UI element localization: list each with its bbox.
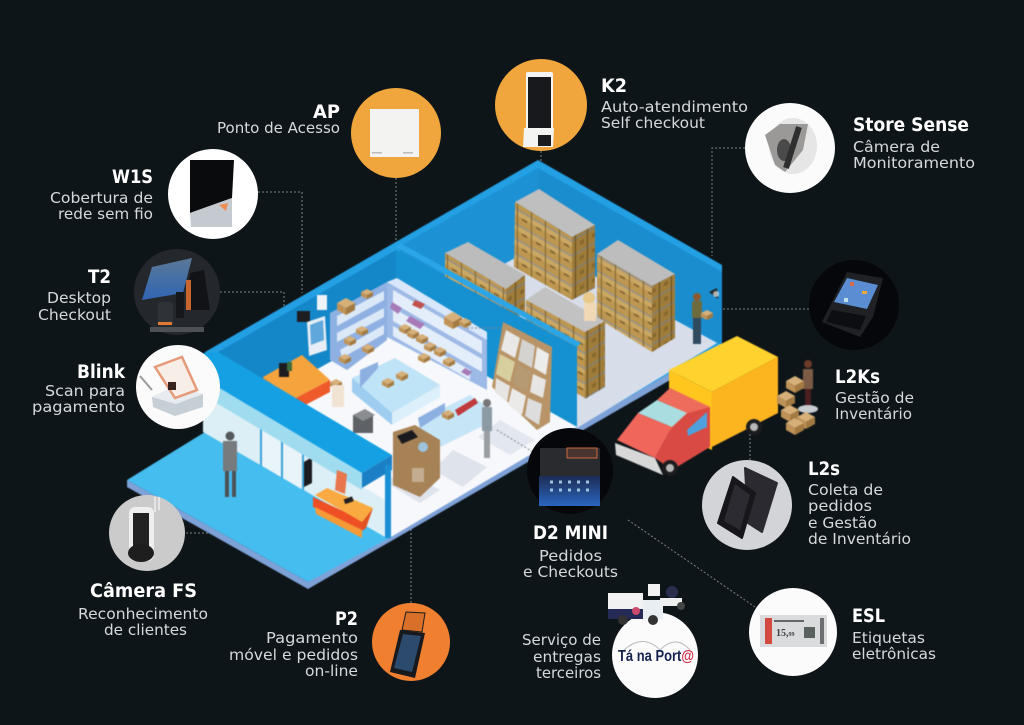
icon: AP bbox=[351, 88, 441, 178]
label: AP bbox=[217, 102, 340, 137]
outdoor customer bbox=[223, 432, 237, 497]
icon: ESL: 15,99 bbox=[776, 628, 794, 639]
label: K2: Self checkout bbox=[601, 114, 705, 132]
label: T2: Desktop bbox=[47, 289, 111, 307]
truck bbox=[615, 336, 778, 476]
label: T2: Checkout bbox=[38, 306, 111, 324]
label: W1S: W1S bbox=[112, 167, 153, 188]
shop islands bbox=[330, 358, 485, 447]
front counter bbox=[313, 470, 373, 538]
label: Store Sense: Câmera de bbox=[853, 138, 940, 156]
label: L2s: L2s bbox=[808, 459, 840, 480]
label: L2s: Coleta de bbox=[808, 481, 883, 499]
label: D2 MINI: D2 MINI bbox=[533, 523, 608, 544]
icon: P2 bbox=[372, 603, 450, 681]
label: Store Sense: Monitoramento bbox=[853, 154, 975, 172]
label: Blink: pagamento bbox=[32, 398, 125, 416]
label: ESL: Etiquetas bbox=[852, 629, 925, 647]
icon: K2 bbox=[495, 59, 587, 151]
icon: T2 bbox=[134, 249, 220, 335]
label: P2: Pagamento bbox=[266, 629, 358, 647]
label: ESL: eletrônicas bbox=[852, 645, 936, 663]
wall devices bbox=[297, 295, 327, 356]
label: K2: Auto-atendimento bbox=[601, 98, 748, 116]
label: W1S bbox=[50, 167, 153, 223]
magazine rack bbox=[492, 322, 552, 430]
warehouse shelves bbox=[445, 189, 675, 399]
label: K2: K2 bbox=[601, 76, 627, 97]
label: P2: móvel e pedidos bbox=[229, 646, 358, 664]
shop back wall bbox=[218, 250, 396, 420]
icon: Camera FS bbox=[109, 495, 185, 571]
label: K2 bbox=[601, 76, 748, 132]
label: Blink: Blink bbox=[77, 362, 126, 383]
warehouse floor bbox=[396, 245, 717, 428]
label: L2Ks: L2Ks bbox=[835, 367, 880, 388]
label: Store Sense: Store Sense bbox=[853, 115, 969, 136]
label: Câmera FS: Reconhecimento bbox=[78, 605, 208, 623]
label: P2 bbox=[229, 609, 358, 680]
label: Store Sense bbox=[853, 115, 975, 172]
floor slab bbox=[127, 340, 722, 589]
label: Blink bbox=[32, 362, 126, 416]
display tower bbox=[393, 425, 440, 497]
label: D2 MINI: e Checkouts bbox=[523, 563, 618, 581]
icon: W1S bbox=[168, 149, 258, 239]
label: AP: AP bbox=[313, 102, 340, 123]
label: L2Ks bbox=[835, 367, 914, 423]
label: P2: P2 bbox=[335, 609, 358, 630]
shop shelving bbox=[330, 278, 487, 390]
label: entregas: Serviço de bbox=[522, 631, 601, 649]
label: L2s: pedidos bbox=[808, 497, 872, 515]
icon: L2Ks bbox=[809, 260, 899, 350]
icon: Tá na Port@ delivery bbox=[608, 584, 698, 698]
label: ESL bbox=[852, 606, 936, 663]
delivery worker and boxes bbox=[777, 360, 818, 435]
label: W1S: Cobertura de bbox=[50, 189, 153, 207]
label: Câmera FS: Câmera FS bbox=[90, 581, 197, 602]
icon: Store Sense bbox=[745, 103, 835, 193]
icon: D2 MINI bbox=[527, 428, 613, 514]
label: W1S: rede sem fio bbox=[58, 205, 153, 223]
label: L2s bbox=[808, 459, 911, 548]
label: T2: T2 bbox=[88, 267, 111, 288]
label: entregas bbox=[522, 631, 601, 682]
icon: Blink bbox=[136, 345, 220, 429]
label: Blink: Scan para bbox=[45, 382, 125, 400]
dashed shop link bbox=[467, 328, 533, 452]
divider wall bbox=[396, 243, 581, 427]
label: L2s: de Inventário bbox=[808, 530, 911, 548]
icon: ESL bbox=[749, 588, 837, 676]
shop customer bbox=[482, 399, 492, 458]
label: entregas: terceiros bbox=[536, 664, 601, 682]
icon: Tá na Port@ delivery: Tá na Port@ bbox=[618, 648, 694, 665]
label: AP: Ponto de Acesso bbox=[217, 119, 340, 137]
label: T2 bbox=[38, 267, 111, 324]
leader lines bbox=[186, 148, 809, 607]
label: L2Ks: Inventário bbox=[835, 405, 912, 423]
label: D2 MINI bbox=[523, 523, 618, 581]
orange checkout counter bbox=[263, 355, 330, 412]
icon: L2s bbox=[702, 460, 792, 550]
label: ESL: ESL bbox=[852, 606, 885, 627]
storefront bbox=[203, 352, 392, 538]
label: D2 MINI: Pedidos bbox=[539, 547, 602, 565]
label: entregas: entregas bbox=[533, 648, 601, 666]
label: P2: on-line bbox=[305, 662, 358, 680]
warehouse walls bbox=[205, 160, 722, 427]
isometric store illustration bbox=[127, 160, 722, 589]
shop floor bbox=[205, 325, 577, 537]
warehouse people bbox=[583, 288, 719, 344]
label: Câmera FS bbox=[78, 581, 208, 639]
label: L2Ks: Gestão de bbox=[835, 389, 914, 407]
label: L2s: e Gestão bbox=[808, 514, 877, 532]
label: Câmera FS: de clientes bbox=[104, 621, 187, 639]
